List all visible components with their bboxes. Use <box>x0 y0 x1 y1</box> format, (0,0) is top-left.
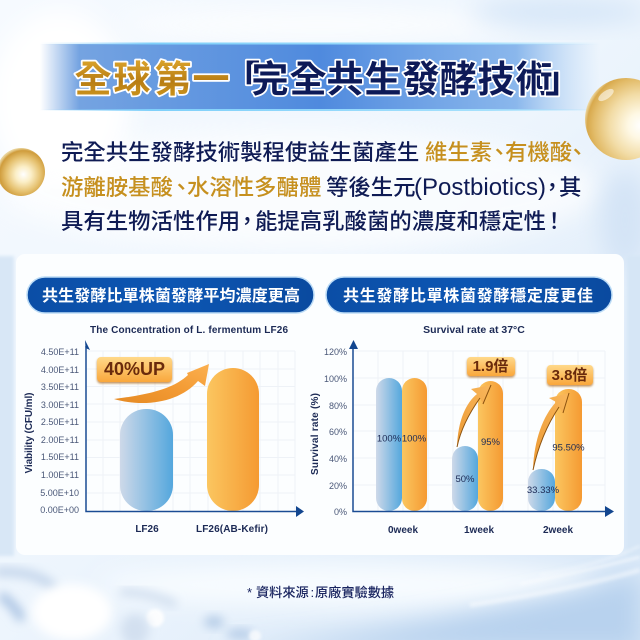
y axis labels: 1.50E+11 <box>41 452 79 462</box>
y axis labels: 80% <box>329 401 347 411</box>
left heading pill: 共生發酵比單株菌發酵平均濃度更高 <box>42 286 300 305</box>
y axis labels: 2.00E+11 <box>41 435 79 445</box>
bar value labels: 95.50% <box>552 442 585 454</box>
chart title: Survival rate at 37°C <box>423 324 525 336</box>
title banner <box>40 42 600 111</box>
badge: 40%UP: 40%UP <box>104 359 165 379</box>
icon: gold sphere left <box>0 148 45 196</box>
y axis labels: 4.50E+11 <box>41 347 79 357</box>
source footnote: * <box>247 585 252 600</box>
badge: 3.8倍 <box>547 365 593 385</box>
intro paragraph: 具有生物活性作用 <box>61 209 240 234</box>
intro paragraph: ， <box>236 209 258 234</box>
bars: 0week <box>376 378 427 511</box>
x axis labels: LF26(AB-Kefir) <box>196 524 268 535</box>
white chart panel <box>16 254 624 555</box>
intro paragraph: 、 <box>170 175 192 200</box>
left heading pill <box>27 277 314 313</box>
x axis labels: 0week <box>388 525 418 536</box>
y axis labels <box>324 347 347 517</box>
bar value labels: 50% <box>455 474 475 485</box>
intro paragraph: 其 <box>559 175 581 200</box>
chart: survival rate at 37°C <box>310 324 614 536</box>
title text: 「 <box>223 59 260 100</box>
y axis labels: 3.00E+11 <box>41 400 79 410</box>
y axis labels: 2.50E+11 <box>41 417 79 427</box>
x axis labels: LF26 <box>135 524 159 535</box>
y axis labels: 100% <box>324 374 347 384</box>
y axis labels <box>40 347 79 515</box>
source footnote: 資料來源 <box>256 585 309 600</box>
y axis labels: 4.00E+11 <box>41 365 79 375</box>
y axis labels: 120% <box>324 347 347 357</box>
intro paragraph: 游離胺基酸 <box>61 175 173 200</box>
intro paragraph: ， <box>541 175 563 200</box>
x axis labels <box>388 525 573 536</box>
axes <box>86 346 298 512</box>
bars: 1week <box>452 381 503 511</box>
intro paragraph: ！ <box>543 209 565 234</box>
arrow: 1week increase <box>457 385 491 447</box>
source footnote: : <box>310 585 314 600</box>
x axis labels: 1week <box>464 525 494 536</box>
bar value labels: 100% <box>402 434 427 444</box>
y axis labels: 60% <box>329 427 347 437</box>
right heading pill: 共生發酵比單株菌發酵穩定度更佳 <box>343 286 593 305</box>
badge: 1.9倍: 1.9倍 <box>473 357 508 375</box>
arrow: increase <box>114 364 209 403</box>
right heading pill <box>326 277 612 313</box>
badge: 3.8倍: 3.8倍 <box>552 366 587 384</box>
y axis labels: 3.50E+11 <box>41 382 79 392</box>
badge: 40%UP <box>97 357 172 382</box>
bar value labels: 95% <box>481 437 501 448</box>
intro paragraph <box>61 140 588 234</box>
y axis labels: 40% <box>329 454 347 464</box>
arrow: 2week increase <box>533 393 569 470</box>
bar value labels: 100% <box>377 434 402 444</box>
y axis labels: 20% <box>329 481 347 491</box>
intro paragraph: 、 <box>566 140 588 165</box>
y axis labels: 5.00E+10 <box>40 488 79 498</box>
bar value labels <box>377 434 585 496</box>
chart title: The Concentration of L. fermentum LF26 <box>90 325 288 336</box>
bar value labels: 33.33% <box>527 485 560 496</box>
title text: 全球第一 <box>74 59 230 100</box>
bars: 2week <box>528 389 582 511</box>
intro paragraph: 維生素 <box>425 140 492 165</box>
y axis labels: 0.00E+00 <box>40 505 79 515</box>
x axis labels: 2week <box>543 525 573 536</box>
intro paragraph: 水溶性多醣體 <box>187 175 321 200</box>
source footnote: 原廠實驗數據 <box>315 584 394 600</box>
chart: concentration of L. fermentum LF26 <box>24 325 304 535</box>
badge: 1.9倍 <box>467 357 515 376</box>
bar: LF26 <box>120 409 173 511</box>
y axis labels: 1.00E+11 <box>41 470 79 480</box>
bar: LF26 AB-Kefir <box>207 368 259 511</box>
y axis labels: 0% <box>334 507 347 517</box>
intro paragraph: 有機酸 <box>505 140 572 165</box>
title text: 」 <box>545 59 582 100</box>
y axis title: Survival rate (%) <box>310 393 321 475</box>
x axis labels <box>135 524 268 535</box>
icon: gold sphere right <box>585 78 640 160</box>
axes <box>353 346 608 512</box>
intro paragraph: 完全共生發酵技術製程使益生菌產生 <box>61 140 419 165</box>
intro paragraph: 等後生元 <box>326 175 416 200</box>
intro paragraph: 、 <box>488 140 510 165</box>
title text: 完全共生發酵技術 <box>252 59 552 100</box>
intro paragraph: 能提高乳酸菌的濃度和穩定性 <box>255 209 546 234</box>
y axis title: Viability (CFU/ml) <box>24 392 35 474</box>
intro paragraph: (Postbiotics) <box>414 174 546 201</box>
